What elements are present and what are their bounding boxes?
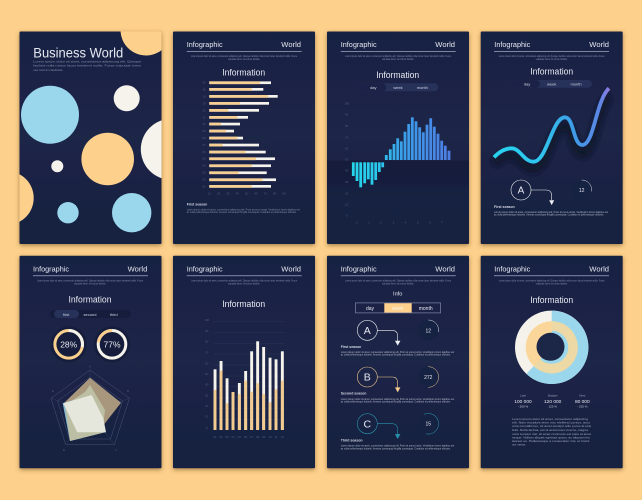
bar chart: 06 [202,150,206,154]
paragraph: nunc tempus nisl, sit amet commodo est justo at amet [512,432,591,436]
column chart: 06 [244,435,248,439]
column chart: 02 [219,435,223,439]
header: vulputate lorem vel rutrum facilisis. [536,58,568,61]
panel: cover Business World [16,30,164,248]
axis labels: 5 [417,220,419,224]
bar chart [202,81,286,196]
tabs: second [84,312,96,317]
axis labels: 90 [345,113,349,117]
header [494,40,609,61]
tabs: week [392,306,404,312]
period tabs: month [417,85,428,90]
gauge 15: 15 [426,422,431,428]
bar chart: 30 [226,192,230,196]
paragraph: elit. Nam tincidunt enim nec eleifend cursus, arcu [512,420,590,424]
header: World [281,40,301,49]
column chart: 60 [205,361,209,365]
stats: Budget [548,394,558,398]
first season note: ac nulla pellentesque lobortis. Aenean consequat fringilla consequat. Curabitur et pellentesque ultricies. [187,211,297,214]
column chart: 80 [205,340,209,344]
period tabs [357,83,438,91]
column chart: 50 [205,372,209,376]
column chart: 07 [250,435,254,439]
axis labels: 6 [429,220,431,224]
bar chart: 08 [202,136,206,140]
period tabs: day [370,85,377,90]
header: Infographic [494,40,530,49]
header: World [281,264,301,273]
period tabs: week [547,82,556,86]
column chart: 11 [274,435,278,439]
header: Lorem ipsum dolor sit amet, consectetur adipiscing elit. Quisque facilisis nulla rutrum lacus hendrerit mollis. Fusce [345,55,452,58]
header [187,264,302,286]
first season note: First season [494,205,515,209]
gauge 272: 272 [424,375,433,381]
header: Infographic [33,264,69,273]
cover description: Lorem ipsum dolor sit amet, consectetur adipiscing elit. Quisque [33,60,142,64]
header: Lorem ipsum dolor sit amet, consectetur adipiscing elit. Quisque facilisis nulla rutrum lacus hendrerit mollis. Fusce [37,280,144,282]
first season note [187,202,300,214]
tabs: first [63,312,70,317]
second season text: ac nulla pellentesque lobortis. Aenean consequat fringilla consequat. Curabitur et pellentesque ultricies. [341,401,451,404]
paragraph: urna convallis leo, sit amet suscipit odio purus at erat [512,424,591,428]
ring 28%: 28% [60,340,78,350]
column chart: 10 [268,435,272,439]
tabs [356,303,440,313]
bar chart: 11 [202,115,206,119]
line chart [494,88,609,169]
second season text [341,392,454,404]
first season text: First season [341,345,361,349]
heading: Information [376,70,419,80]
first season text: ac nulla pellentesque lobortis. Aenean consequat fringilla consequat. Curabitur et pellentesque ultricies. [341,354,451,357]
bar chart: 13 [202,101,206,105]
axis labels: 0 [346,214,348,218]
gauge 12: 12 [579,188,585,194]
heading: Information [222,299,265,309]
tabs: month [419,306,433,312]
bar chart: 50 [245,192,249,196]
column chart: 0 [206,426,208,430]
bar chart: 70 [264,192,267,196]
axis labels: 80 [345,124,349,128]
callout A [511,180,554,204]
donut [515,311,588,384]
bar chart: 20 [217,192,221,196]
bar chart: 90 [282,192,286,196]
radar chart [51,364,130,452]
bar chart: 12 [202,108,206,112]
lower dark band [327,161,469,213]
callout B [357,367,400,392]
cover circles [20,32,162,232]
cover description: facilisis nulla rutrum lacus hendrerit mollis. Fusce vulputate lorem [33,64,142,68]
tabs: third [110,312,118,317]
tabs [50,310,131,318]
radar chart: D [63,448,66,452]
panel: donut chart [481,256,623,468]
column chart: 40 [205,383,209,387]
stats: 120 000 [544,399,562,405]
panel: line curve [481,32,623,244]
cover title: Business World [33,44,123,60]
gauge 12 [572,180,592,200]
bar chart: 03 [202,171,206,175]
column chart: 05 [238,435,241,439]
callout C [357,414,400,438]
second season text: Lorem ipsum dolor sit amet, consectetur adipiscing elit. Proin at purus turpis. Vestibulum lorem dapibus est [341,398,454,401]
first season note: First season [187,202,207,206]
third season text: Third season [341,438,362,442]
paragraph: laoreet eu. Pellentesque a consectetur nisi, et tincid- [512,439,590,443]
header: World [589,40,609,49]
first season note: ac nulla pellentesque lobortis. Aenean consequat fringilla consequat. Curabitur et pellentesque ultricies. [494,214,604,217]
paragraph: felis. Nulla lacinia, est id accumsan viverra, magna [512,428,588,432]
second season text: Second season [341,392,366,396]
bar chart: 02 [202,178,206,182]
bars [352,117,450,187]
axis labels: 70 [345,135,349,139]
axis labels: 1 [368,220,370,224]
bar chart: 60 [254,192,258,196]
bar chart: 40 [236,192,239,196]
axis labels: 20 [345,191,349,195]
axis labels: 4 [404,220,406,224]
panel: horizontal bars [173,32,315,244]
column chart: 04 [231,435,235,439]
paragraph: Lorem ipsum dolor sit amet, consectetur adipiscing [512,417,588,421]
axis labels: 3 [392,220,394,224]
axis labels: 10 [345,202,349,206]
column chart: 70 [205,351,209,355]
bar chart: 04 [202,164,206,168]
first season text: Lorem ipsum dolor sit amet, consectetur adipiscing elit. Proin at purus turpis. Vestibulum lorem dapibus est [341,351,454,354]
period tabs: week [393,85,403,90]
bar chart: 16 [202,81,206,85]
header: World [128,264,147,273]
stats: - 220 % [577,404,588,408]
header [33,264,148,286]
header: Lorem ipsum dolor sit amet, consectetur adipiscing elit. Quisque facilisis nulla rutrum lacus hendrerit mollis. Fusce [499,55,605,58]
header: vulputate lorem vel rutrum facilisis. [536,282,568,286]
bar chart: 09 [202,129,206,133]
bar chart: 10 [208,192,211,196]
column chart: 03 [225,435,229,439]
stats [514,394,590,408]
header: Infographic [494,264,530,273]
heading: Information [222,68,265,78]
header: Infographic [341,264,377,273]
third season text: ac nulla pellentesque lobortis. Aenean consequat fringilla consequat. Curabitur et pellentesque ultricies. [341,447,451,450]
bar chart: 05 [202,157,206,161]
radar chart: B [127,389,129,393]
header: World [589,264,609,273]
period tabs: day [524,82,530,86]
paragraph [512,417,591,446]
column chart: 09 [262,435,266,439]
panel: seasons info [327,256,469,468]
panel: column chart with negative values [327,32,469,244]
first season note: Lorem ipsum dolor sit amet, consectetur adipiscing elit. Proin at purus turpis. Vestibulum lorem dapibus est [494,211,608,214]
header: World [435,40,455,49]
third season text [341,438,454,450]
ring 77% [94,326,130,362]
heading: Info [393,291,402,297]
third season text: Lorem ipsum dolor sit amet, consectetur adipiscing elit. Proin at purus turpis. Vestibulum lorem dapibus est [341,445,454,448]
paragraph: unt metus. [512,442,526,446]
header: Infographic [341,40,377,49]
header: World [435,264,455,273]
header [494,264,609,286]
axis labels: 40 [345,169,349,173]
bar chart: 07 [202,143,206,147]
column chart: 30 [205,393,209,397]
header: Lorem ipsum dolor sit amet, consectetur adipiscing elit. Quisque facilisis nulla rutrum lacus hendrerit mollis. Fusce [499,280,605,282]
axis labels: 50 [345,158,349,162]
gauge 12 [418,320,439,341]
stats: Last [520,394,526,398]
stats: 100 000 [514,399,532,405]
bar chart: 10 [202,122,206,126]
axis labels: 30 [345,180,349,184]
first season text [341,345,454,357]
header: Infographic [187,40,223,49]
letter A: A [518,186,525,196]
column chart [204,318,285,439]
header: Lorem ipsum dolor sit amet, consectetur adipiscing elit. Quisque facilisis nulla rutrum lacus hendrerit mollis. Fusce [191,55,298,58]
first season note: Lorem ipsum dolor sit amet, consectetur adipiscing elit. Proin at purus turpis. Vestibulum lorem dapibus est [187,208,300,212]
header [341,264,456,286]
column chart: 20 [205,404,209,408]
column chart: 08 [256,435,260,439]
heading: Information [68,294,112,304]
stats: - 200 % [518,404,528,408]
first season note [494,205,608,217]
callout A [357,320,400,345]
cover description [33,60,142,72]
stats: 125 % [548,404,557,408]
gauge 12: 12 [426,328,431,334]
header [341,40,456,61]
tabs: day [366,306,375,312]
panel: rings and radar [20,256,162,468]
header: vulputate lorem vel rutrum facilisis. [228,282,260,286]
gauge 15 [418,410,442,436]
gauge 272 [418,367,439,387]
column chart: 100 [204,318,210,322]
header: vulputate lorem vel rutrum facilisis. [228,58,260,61]
header: Lorem ipsum dolor sit amet, consectetur adipiscing elit. Quisque facilisis nulla rutrum lacus hendrerit mollis. Fusce [191,280,298,282]
header: vulputate lorem vel rutrum facilisis. [382,282,414,286]
letter A: A [364,325,371,337]
paragraph: neque. Nullam aliquet egestas quam, ac aliquam leo [512,436,590,440]
axis labels: 60 [345,146,349,150]
bar chart: 80 [273,192,277,196]
column chart: 12 [281,435,284,439]
letter C: C [364,418,372,430]
column chart: 10 [205,415,209,419]
stats: 80 000 [575,399,590,405]
column chart: 01 [213,435,217,439]
axis labels: 7 [441,220,443,224]
letter B: B [364,372,371,384]
ring 77%: 77% [103,340,121,350]
heading: Information [530,66,573,76]
axis labels: 2 [380,220,382,224]
panel: stacked column chart [173,256,315,468]
radar chart: C [115,448,118,452]
axis labels: 100 [344,102,350,106]
axis labels: 0 [356,220,358,224]
radar chart: E [52,389,54,393]
bar chart: 15 [202,87,206,91]
header: Lorem ipsum dolor sit amet, consectetur adipiscing elit. Quisque facilisis nulla rutrum lacus hendrerit mollis. Fusce [345,280,452,282]
heading: Information [530,295,573,305]
axis labels [344,102,443,224]
header: vulputate lorem vel rutrum facilisis. [74,282,106,286]
radar chart: A [89,364,91,368]
bar chart: 14 [202,94,206,98]
ring 28% [51,326,87,362]
column chart: 90 [205,329,209,333]
stats: Next [579,394,586,398]
period tabs [511,80,592,88]
cover description: vel rutrum facilisis. [33,68,64,72]
header: Infographic [187,264,223,273]
header [187,40,302,61]
period tabs: month [570,82,582,86]
header: vulputate lorem vel rutrum facilisis. [382,58,414,61]
bar chart: 01 [202,184,206,188]
